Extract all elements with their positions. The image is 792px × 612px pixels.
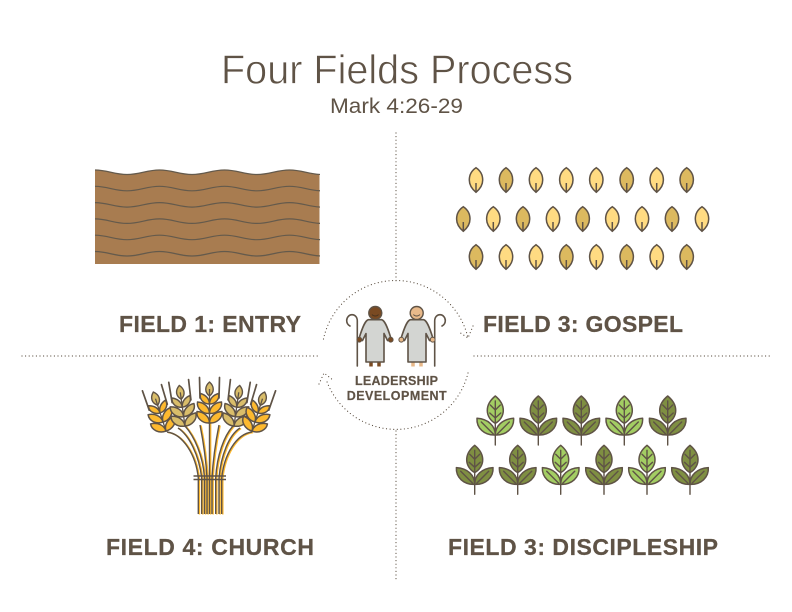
field 3 gospel label: FIELD 3: GOSPEL xyxy=(483,311,683,337)
quadrant dividers xyxy=(22,133,772,582)
cycle arrow: bottom xyxy=(319,373,468,429)
title: Four Fields Process xyxy=(221,46,573,92)
cycle arrow: top xyxy=(324,280,473,339)
field 3: plants illustration xyxy=(456,396,708,494)
field 1 label: FIELD 1: ENTRY xyxy=(119,311,301,337)
field 4 label: FIELD 4: CHURCH xyxy=(106,534,314,560)
field 3: seeds illustration xyxy=(457,168,709,269)
field 3 discipleship label: FIELD 3: DISCIPLESHIP xyxy=(448,534,718,560)
field 1: soil illustration xyxy=(94,170,322,264)
subtitle: Mark 4:26-29 xyxy=(330,95,463,118)
leadership development label xyxy=(347,374,447,403)
icon: leader left xyxy=(347,306,393,366)
center: leadership development cycle xyxy=(319,280,473,429)
icon: leader right xyxy=(399,306,445,366)
field 4: wheat sheaf illustration xyxy=(140,378,278,514)
wheat binding xyxy=(194,476,226,480)
leadership development label: DEVELOPMENT xyxy=(347,389,447,403)
leadership development label: LEADERSHIP xyxy=(355,374,438,388)
wheat ears xyxy=(140,378,278,436)
wheat stems xyxy=(167,423,253,514)
